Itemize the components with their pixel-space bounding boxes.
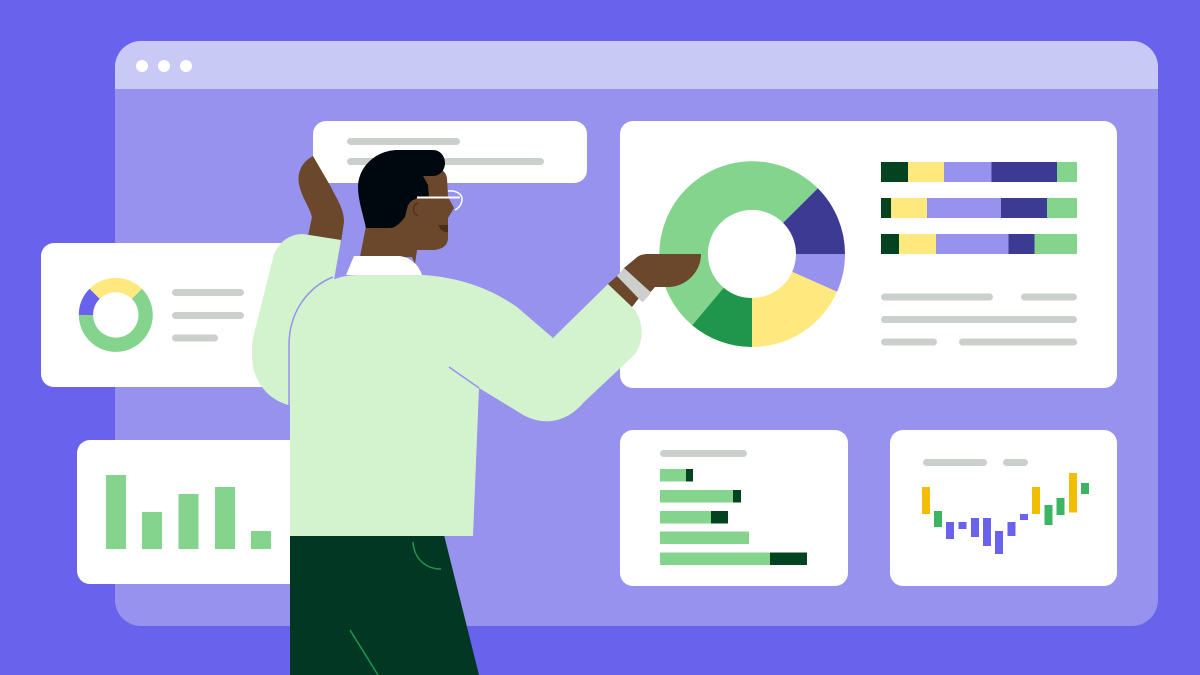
panel: top text card [313, 121, 587, 183]
ear inner line [414, 203, 418, 216]
mouth [438, 225, 448, 232]
window title bar [115, 41, 1158, 89]
chart title lines [923, 459, 1028, 466]
neck and face [360, 168, 454, 264]
person [252, 150, 701, 675]
sweater torso and pointing arm [290, 275, 642, 536]
panel: main donut and stacked bars [620, 121, 1117, 388]
stacked bars [881, 162, 1077, 254]
small donut chart [79, 278, 153, 352]
candlesticks [922, 473, 1089, 554]
horizontal bars [660, 469, 807, 565]
shirt collar [346, 256, 422, 275]
columns [106, 475, 271, 549]
sleeve fold line [449, 367, 479, 388]
donut chart [659, 161, 845, 347]
raised hand [299, 156, 344, 242]
hair [358, 150, 445, 228]
trousers [290, 535, 479, 675]
glasses [417, 191, 462, 210]
panel: column chart card [77, 440, 311, 584]
window body [115, 41, 1158, 626]
wrist [608, 276, 639, 307]
panel: candlestick chart card [890, 430, 1117, 586]
placeholder text lines [881, 294, 1077, 346]
window control dots [136, 60, 192, 72]
chart title line [660, 450, 747, 457]
placeholder text lines [172, 289, 244, 342]
panel: small donut card [41, 243, 311, 387]
panel: horizontal bar chart card [620, 430, 848, 586]
watch band [617, 268, 651, 302]
ear [408, 199, 424, 217]
raised upper arm [252, 234, 341, 405]
pointing hand [624, 254, 701, 292]
arm outline [289, 277, 333, 405]
browser window [115, 41, 1158, 626]
